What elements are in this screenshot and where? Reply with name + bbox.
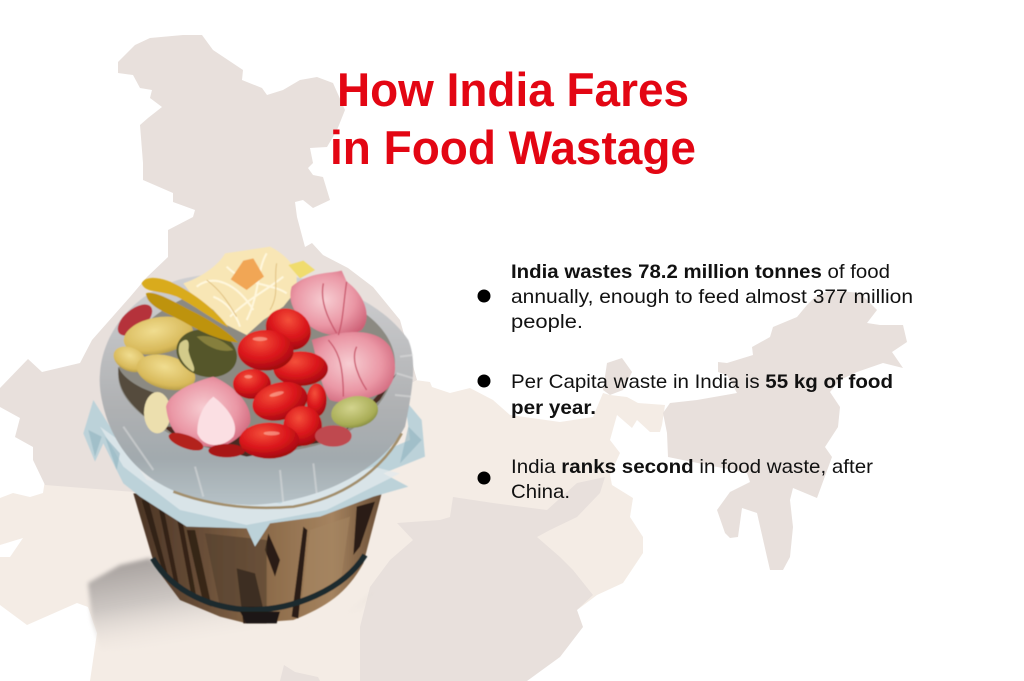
bullet 2 [478, 371, 893, 419]
title [330, 63, 696, 174]
food: yellow peppers [142, 278, 238, 343]
twine [173, 433, 402, 508]
bullet 1 [478, 261, 913, 333]
liner rim [100, 272, 413, 505]
bucket shadow [88, 558, 375, 650]
title: in Food Wastage [330, 121, 696, 174]
food: pink garlic [166, 271, 395, 447]
bullet 1: annually, enough to feed almost 377 million [511, 286, 913, 308]
bullet 2: per year. [511, 397, 596, 419]
map: small northern patch [603, 358, 632, 395]
bullet 3: China. [511, 481, 570, 503]
map: north-east region [663, 290, 907, 570]
food: tomatoes [166, 300, 352, 459]
food: dark pickle [171, 323, 242, 384]
inner bucket [118, 282, 395, 453]
bullet 3: India ranks second in food waste, after [511, 456, 874, 478]
liner rim folds [123, 355, 413, 503]
food: pickled gherkins [109, 312, 199, 433]
bullet 2: Per Capita waste in India is 55 kg of food [511, 371, 893, 393]
map: small dark notch at bottom edge [280, 665, 320, 681]
title: How India Fares [337, 63, 689, 116]
food: red item at left [112, 299, 158, 341]
map: northern region [0, 35, 417, 492]
bucket body [133, 493, 382, 623]
food: sauerkraut [183, 247, 315, 335]
bullet 1: India wastes 78.2 million tonnes of food [511, 261, 890, 283]
bullet 1: people. [511, 311, 583, 333]
bullet list [478, 261, 913, 503]
bullet 3 [478, 456, 874, 503]
map: light central and western region [0, 380, 665, 681]
photo: wooden bucket of pickled vegetables [83, 247, 425, 623]
food: green olive [329, 392, 381, 432]
plastic liner flaps [83, 400, 425, 547]
map: southern peninsula [360, 477, 605, 681]
